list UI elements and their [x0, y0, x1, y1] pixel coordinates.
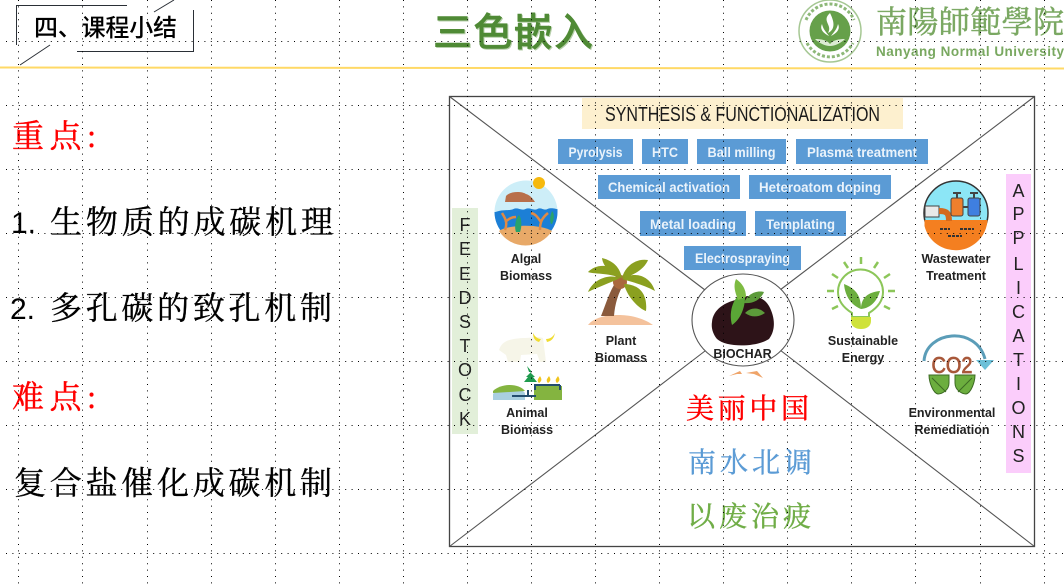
sustainable energy label: Energy [842, 351, 884, 365]
key point 2: 多孔碳的致孔机制 [50, 290, 332, 326]
applications label: S [1012, 446, 1025, 466]
difficulties heading: 难点: [12, 379, 96, 415]
header rule [0, 68, 1064, 69]
slogan: beautiful China: 美丽中国 [686, 393, 809, 425]
applications label: I [1016, 278, 1021, 298]
section heading box: 四、课程小结 [34, 15, 177, 42]
feedstock label [452, 208, 478, 434]
applications label: P [1012, 204, 1025, 224]
feedstock label: S [459, 312, 471, 332]
applications label: T [1013, 350, 1024, 370]
plant biomass label: Plant [606, 334, 637, 348]
title: 三色嵌入 [433, 12, 593, 55]
environmental remediation label: Remediation [914, 423, 990, 437]
icon: CO2 remediation [924, 336, 994, 394]
algal biomass label: Algal [511, 252, 541, 266]
applications label: O [1011, 398, 1026, 418]
synthesis heading [582, 98, 903, 129]
feedstock label: T [460, 336, 470, 356]
method tags: Templating [766, 216, 835, 232]
animal biomass label: Animal [506, 406, 548, 420]
wastewater label: Treatment [926, 269, 987, 283]
method tags: Ball milling [708, 144, 776, 160]
applications label [1006, 174, 1031, 473]
applications label: N [1012, 422, 1025, 442]
slogan: south to north water: 南水北调 [688, 447, 812, 479]
key point 1: 1. [11, 207, 36, 240]
wastewater label: Wastewater [921, 252, 991, 266]
plant biomass label: Biomass [595, 351, 647, 365]
method tags: Metal loading [650, 216, 736, 232]
method tags: Heteroatom doping [759, 179, 881, 195]
section heading box [16, 0, 194, 65]
method tags: HTC [652, 144, 678, 160]
method tags: Pyrolysis [568, 144, 623, 160]
title: 三色嵌入 [434, 13, 594, 56]
feedstock label: F [460, 215, 470, 235]
biochar diagram panel [450, 96, 1034, 546]
icon: wastewater treatment [924, 181, 988, 250]
key point 2: 2. [10, 293, 35, 326]
applications label: I [1016, 374, 1021, 394]
difficulty item: 复合盐催化成碳机制 [14, 465, 332, 501]
university name [876, 5, 1064, 59]
icon: palm tree [588, 258, 655, 325]
icon: sustainable energy bulb [827, 257, 895, 329]
key point 1: 生物质的成碳机理 [50, 204, 333, 240]
biochar centre [692, 274, 794, 366]
feedstock label: D [458, 288, 472, 308]
icon: CO2 remediation: CO2 [932, 352, 972, 378]
key points heading: 重点: [12, 118, 96, 154]
method tags [558, 139, 928, 270]
icon: algal biomass [494, 177, 558, 245]
method tags: Chemical activation [608, 179, 730, 195]
applications label: C [1012, 302, 1025, 322]
feedstock label: C [458, 385, 472, 405]
method tags: Plasma treatment [807, 144, 917, 160]
sustainable energy label: Sustainable [828, 334, 898, 348]
environmental remediation label: Environmental [909, 406, 995, 420]
feedstock label: O [458, 360, 472, 380]
applications label: A [1012, 326, 1025, 346]
animal biomass label: Biomass [501, 423, 553, 437]
feedstock label: E [459, 239, 471, 259]
applications label: P [1012, 228, 1025, 248]
applications label: L [1013, 254, 1024, 274]
icon: animal and digester [493, 333, 562, 400]
orange fragments [729, 371, 763, 378]
slogan: waste treats waste: 以废治疲 [687, 501, 811, 533]
university name: Nanyang Normal University [876, 44, 1064, 59]
feedstock label: E [459, 264, 471, 284]
biochar centre: BIOCHAR [713, 347, 772, 361]
method tags: Electrospraying [695, 250, 790, 266]
university logo [799, 0, 861, 62]
university name: 南陽師範學院 [876, 5, 1064, 40]
applications label: A [1012, 181, 1025, 201]
algal biomass label: Biomass [500, 269, 552, 283]
synthesis heading: SYNTHESIS & FUNCTIONALIZATION [605, 104, 880, 126]
feedstock label: K [459, 409, 471, 429]
